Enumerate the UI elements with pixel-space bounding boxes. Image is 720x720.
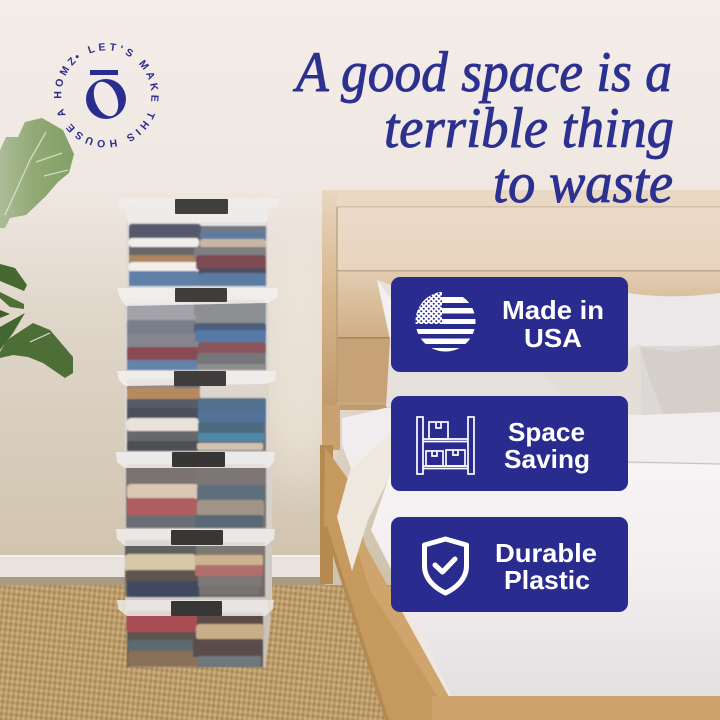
card: made in usa <box>391 277 628 372</box>
title <box>292 41 674 215</box>
blanket <box>337 432 392 571</box>
title: terrible thing <box>384 97 674 160</box>
bed post <box>320 445 333 584</box>
label: made in usa <box>502 295 604 353</box>
logo: circular tagline: • LET'S MAKE THIS HOUSE A HOMZ <box>54 43 159 148</box>
plant <box>0 118 74 378</box>
pillow: textured cream <box>540 343 642 418</box>
box 1 <box>118 199 280 288</box>
title: A good space is a <box>292 41 672 104</box>
icon: usa flag globe <box>415 291 476 352</box>
bed <box>320 190 720 720</box>
label: made in usa: Made in <box>502 295 604 325</box>
box 5 <box>116 529 275 600</box>
box 2 <box>117 288 278 371</box>
title: to waste <box>493 152 673 215</box>
sheet <box>342 408 720 482</box>
baseboard <box>0 555 325 585</box>
label: space saving: Space <box>508 417 585 447</box>
logo: o mark <box>86 78 126 120</box>
pillow backing <box>386 345 720 420</box>
label: durable plastic <box>495 538 597 595</box>
box 3 <box>117 371 276 453</box>
plant: lower leaves <box>0 264 73 378</box>
stack of storage boxes <box>116 199 280 667</box>
box 4 <box>116 452 275 530</box>
icon: shelf with boxes <box>417 417 474 474</box>
pillow: textured grey <box>640 345 720 416</box>
carpet <box>0 585 400 720</box>
label: made in usa: USA <box>524 323 582 353</box>
box 6 <box>117 600 274 667</box>
headboard <box>322 190 720 450</box>
duvet <box>371 463 720 696</box>
plant: upper leaf <box>0 118 74 228</box>
side rail <box>324 447 449 720</box>
label: durable plastic: Plastic <box>504 565 590 595</box>
card: durable plastic <box>391 517 628 612</box>
label: durable plastic: Durable <box>495 538 597 568</box>
logo: bar <box>90 70 118 75</box>
pillow: large white <box>377 280 720 407</box>
foot rail <box>432 696 720 720</box>
logo <box>54 43 159 148</box>
duvet edge shadow <box>628 462 720 464</box>
icon: shield check <box>424 539 466 593</box>
card: space saving <box>391 396 628 491</box>
label: space saving <box>504 417 590 474</box>
label: space saving: Saving <box>504 444 590 474</box>
